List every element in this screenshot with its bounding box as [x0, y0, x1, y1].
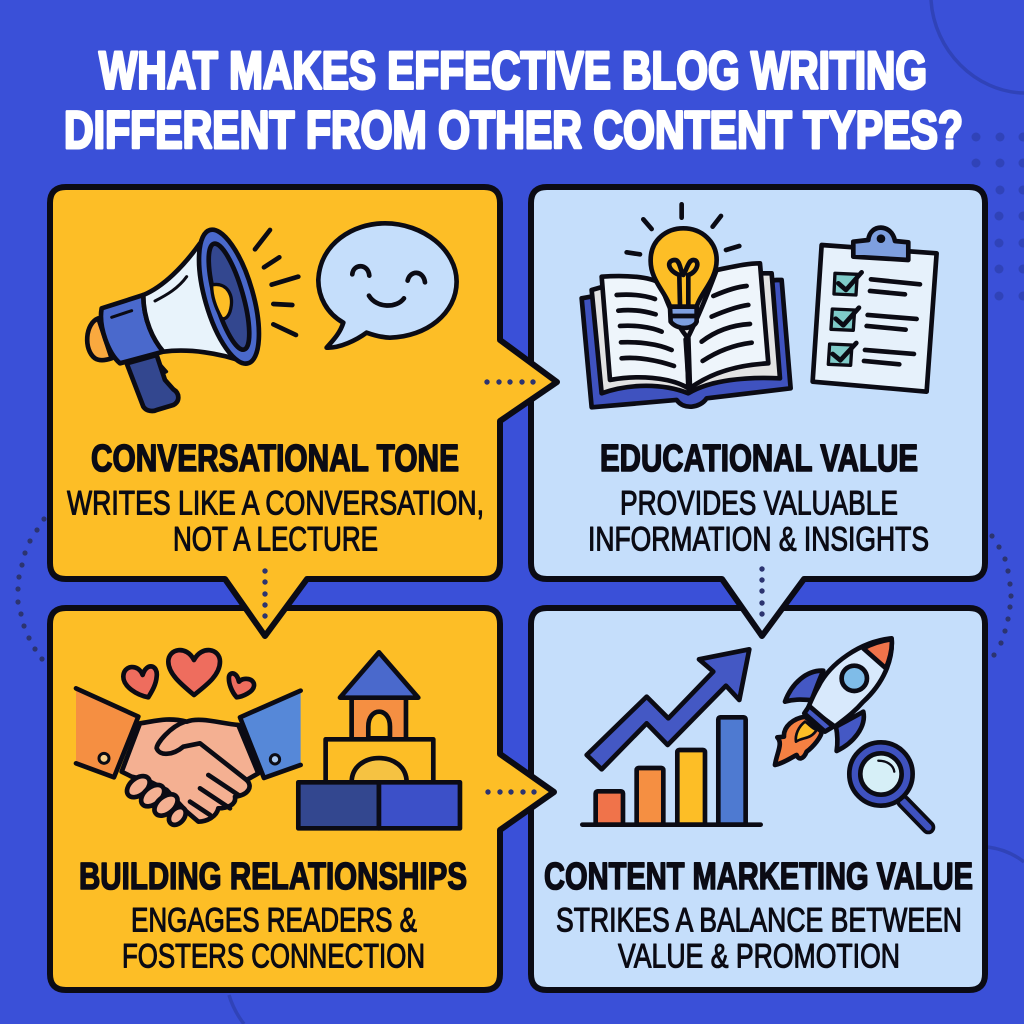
heading: educational value: EDUCATIONAL VALUE	[600, 438, 918, 480]
icon: rocket	[775, 638, 892, 765]
body: educational value	[588, 484, 929, 558]
panel shape with pointer	[50, 187, 557, 636]
icon: hearts	[123, 650, 254, 697]
panel: conversational tone	[50, 187, 557, 636]
icon: sound rays	[255, 230, 298, 335]
icon: smiling speech bubble	[318, 223, 457, 348]
icon group: megaphone and speech bubble	[87, 223, 457, 411]
icon group: handshake, hearts, blocks	[76, 650, 460, 828]
icon: building blocks	[298, 652, 460, 828]
body: conversational tone	[67, 484, 484, 558]
icon: growth arrow	[587, 649, 749, 769]
title	[64, 42, 963, 160]
icon group: book, bulb, clipboard	[582, 204, 937, 407]
panel shape	[531, 608, 985, 990]
right pointer dots	[484, 379, 536, 385]
panel: building relationships	[50, 608, 554, 990]
body: building relationships: FOSTERS CONNECTION	[122, 938, 425, 976]
icon: magnifier	[849, 742, 928, 827]
icon: light bulb	[627, 204, 739, 328]
body: educational value: PROVIDES VALUABLE	[620, 484, 898, 522]
body: conversational tone: NOT A LECTURE	[173, 520, 378, 558]
bottom pointer dots	[262, 568, 268, 619]
body: conversational tone: WRITES LIKE A CONVERSATION,	[67, 484, 484, 522]
decorative dot grid: top right	[972, 132, 1024, 300]
panel shape with pointer	[50, 608, 554, 990]
body: educational value: INFORMATION & INSIGHTS	[588, 520, 929, 558]
body: content marketing value	[556, 902, 962, 976]
bar chart	[582, 717, 761, 825]
icon group: growth chart, rocket, magnifier	[582, 638, 928, 827]
decorative arc: top right	[931, 0, 1024, 93]
icon: megaphone	[87, 223, 271, 411]
body: building relationships	[122, 902, 425, 976]
panel: educational value	[531, 187, 985, 636]
dotted arc: right	[989, 533, 1014, 658]
panel: content marketing value	[531, 608, 985, 990]
panel shape with pointer	[531, 187, 985, 636]
heading: conversational tone: CONVERSATIONAL TONE	[91, 438, 459, 480]
dotted arc: left	[15, 516, 47, 662]
body: building relationships: ENGAGES READERS &	[131, 902, 417, 940]
icon: clipboard	[813, 228, 937, 392]
decorative arc: bottom right	[988, 847, 1024, 862]
decorative arc: bottom left	[229, 995, 244, 1024]
pointer dots	[759, 566, 765, 617]
icon: handshake	[76, 688, 301, 828]
pointer dots	[485, 789, 537, 795]
icon: open book	[582, 263, 791, 407]
heading: building relationships: BUILDING RELATIONSHIPS	[79, 856, 467, 898]
body: content marketing value: VALUE & PROMOTION	[618, 938, 900, 976]
